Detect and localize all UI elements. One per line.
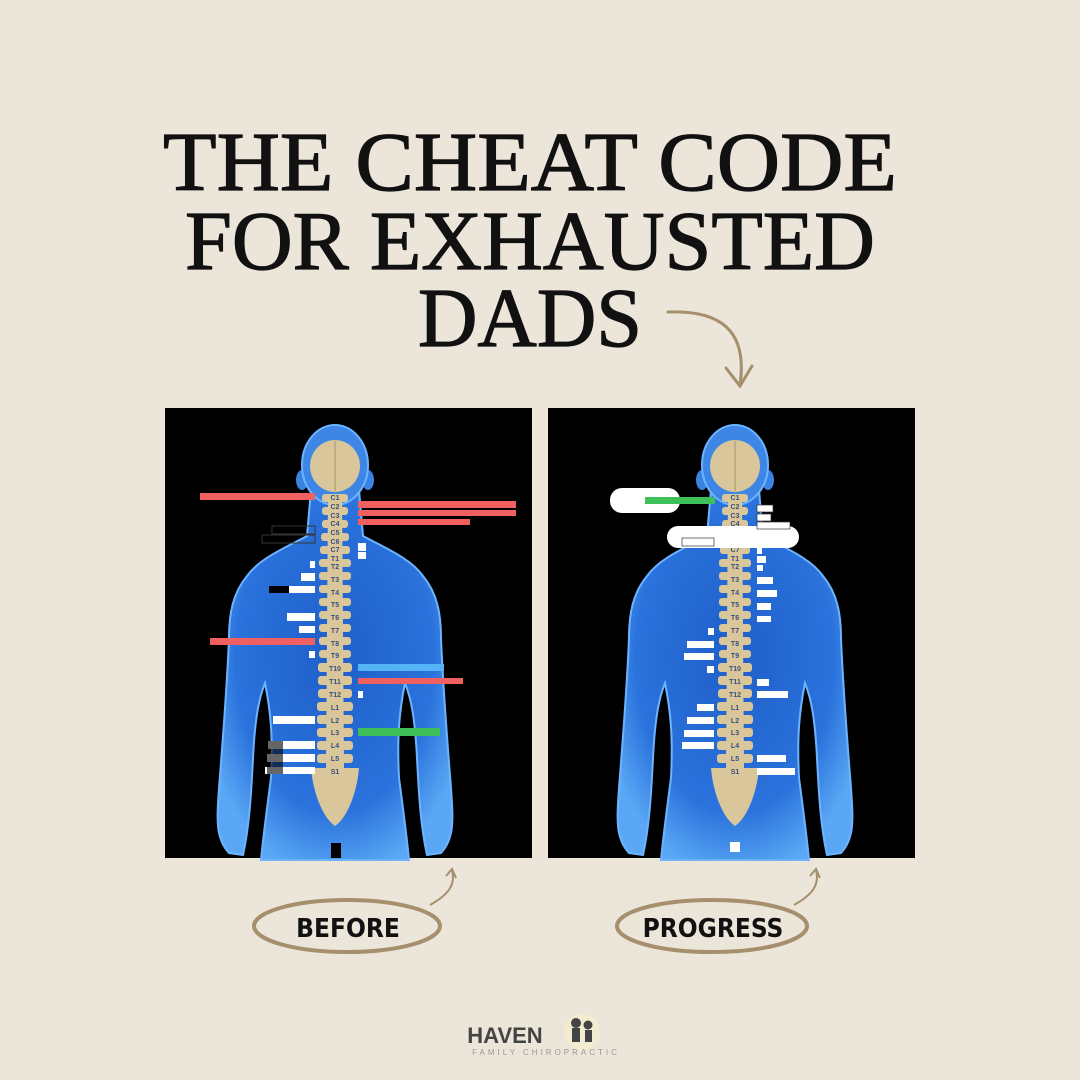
label: progress — [617, 869, 820, 952]
label: before: BEFORE — [296, 914, 400, 944]
title — [163, 116, 897, 365]
logo: haven family chiropractic — [467, 1014, 620, 1057]
label: progress: PROGRESS — [643, 914, 783, 944]
title: FOR EXHAUSTED — [185, 195, 875, 288]
title: THE CHEAT CODE — [163, 116, 897, 209]
arrow: title to progress — [668, 312, 752, 386]
figure: body with spine — [618, 425, 852, 860]
label: before — [254, 869, 456, 952]
figure: body with spine — [218, 425, 452, 860]
panel: progress — [548, 408, 915, 860]
bars: progress scan — [610, 488, 799, 852]
title: DADS — [418, 272, 642, 365]
logo: haven family chiropractic: HAVEN — [467, 1023, 543, 1048]
bars: before scan — [200, 493, 516, 858]
panel: before — [165, 408, 532, 860]
logo: haven family chiropractic: FAMILY CHIROPRACTIC — [472, 1048, 620, 1057]
